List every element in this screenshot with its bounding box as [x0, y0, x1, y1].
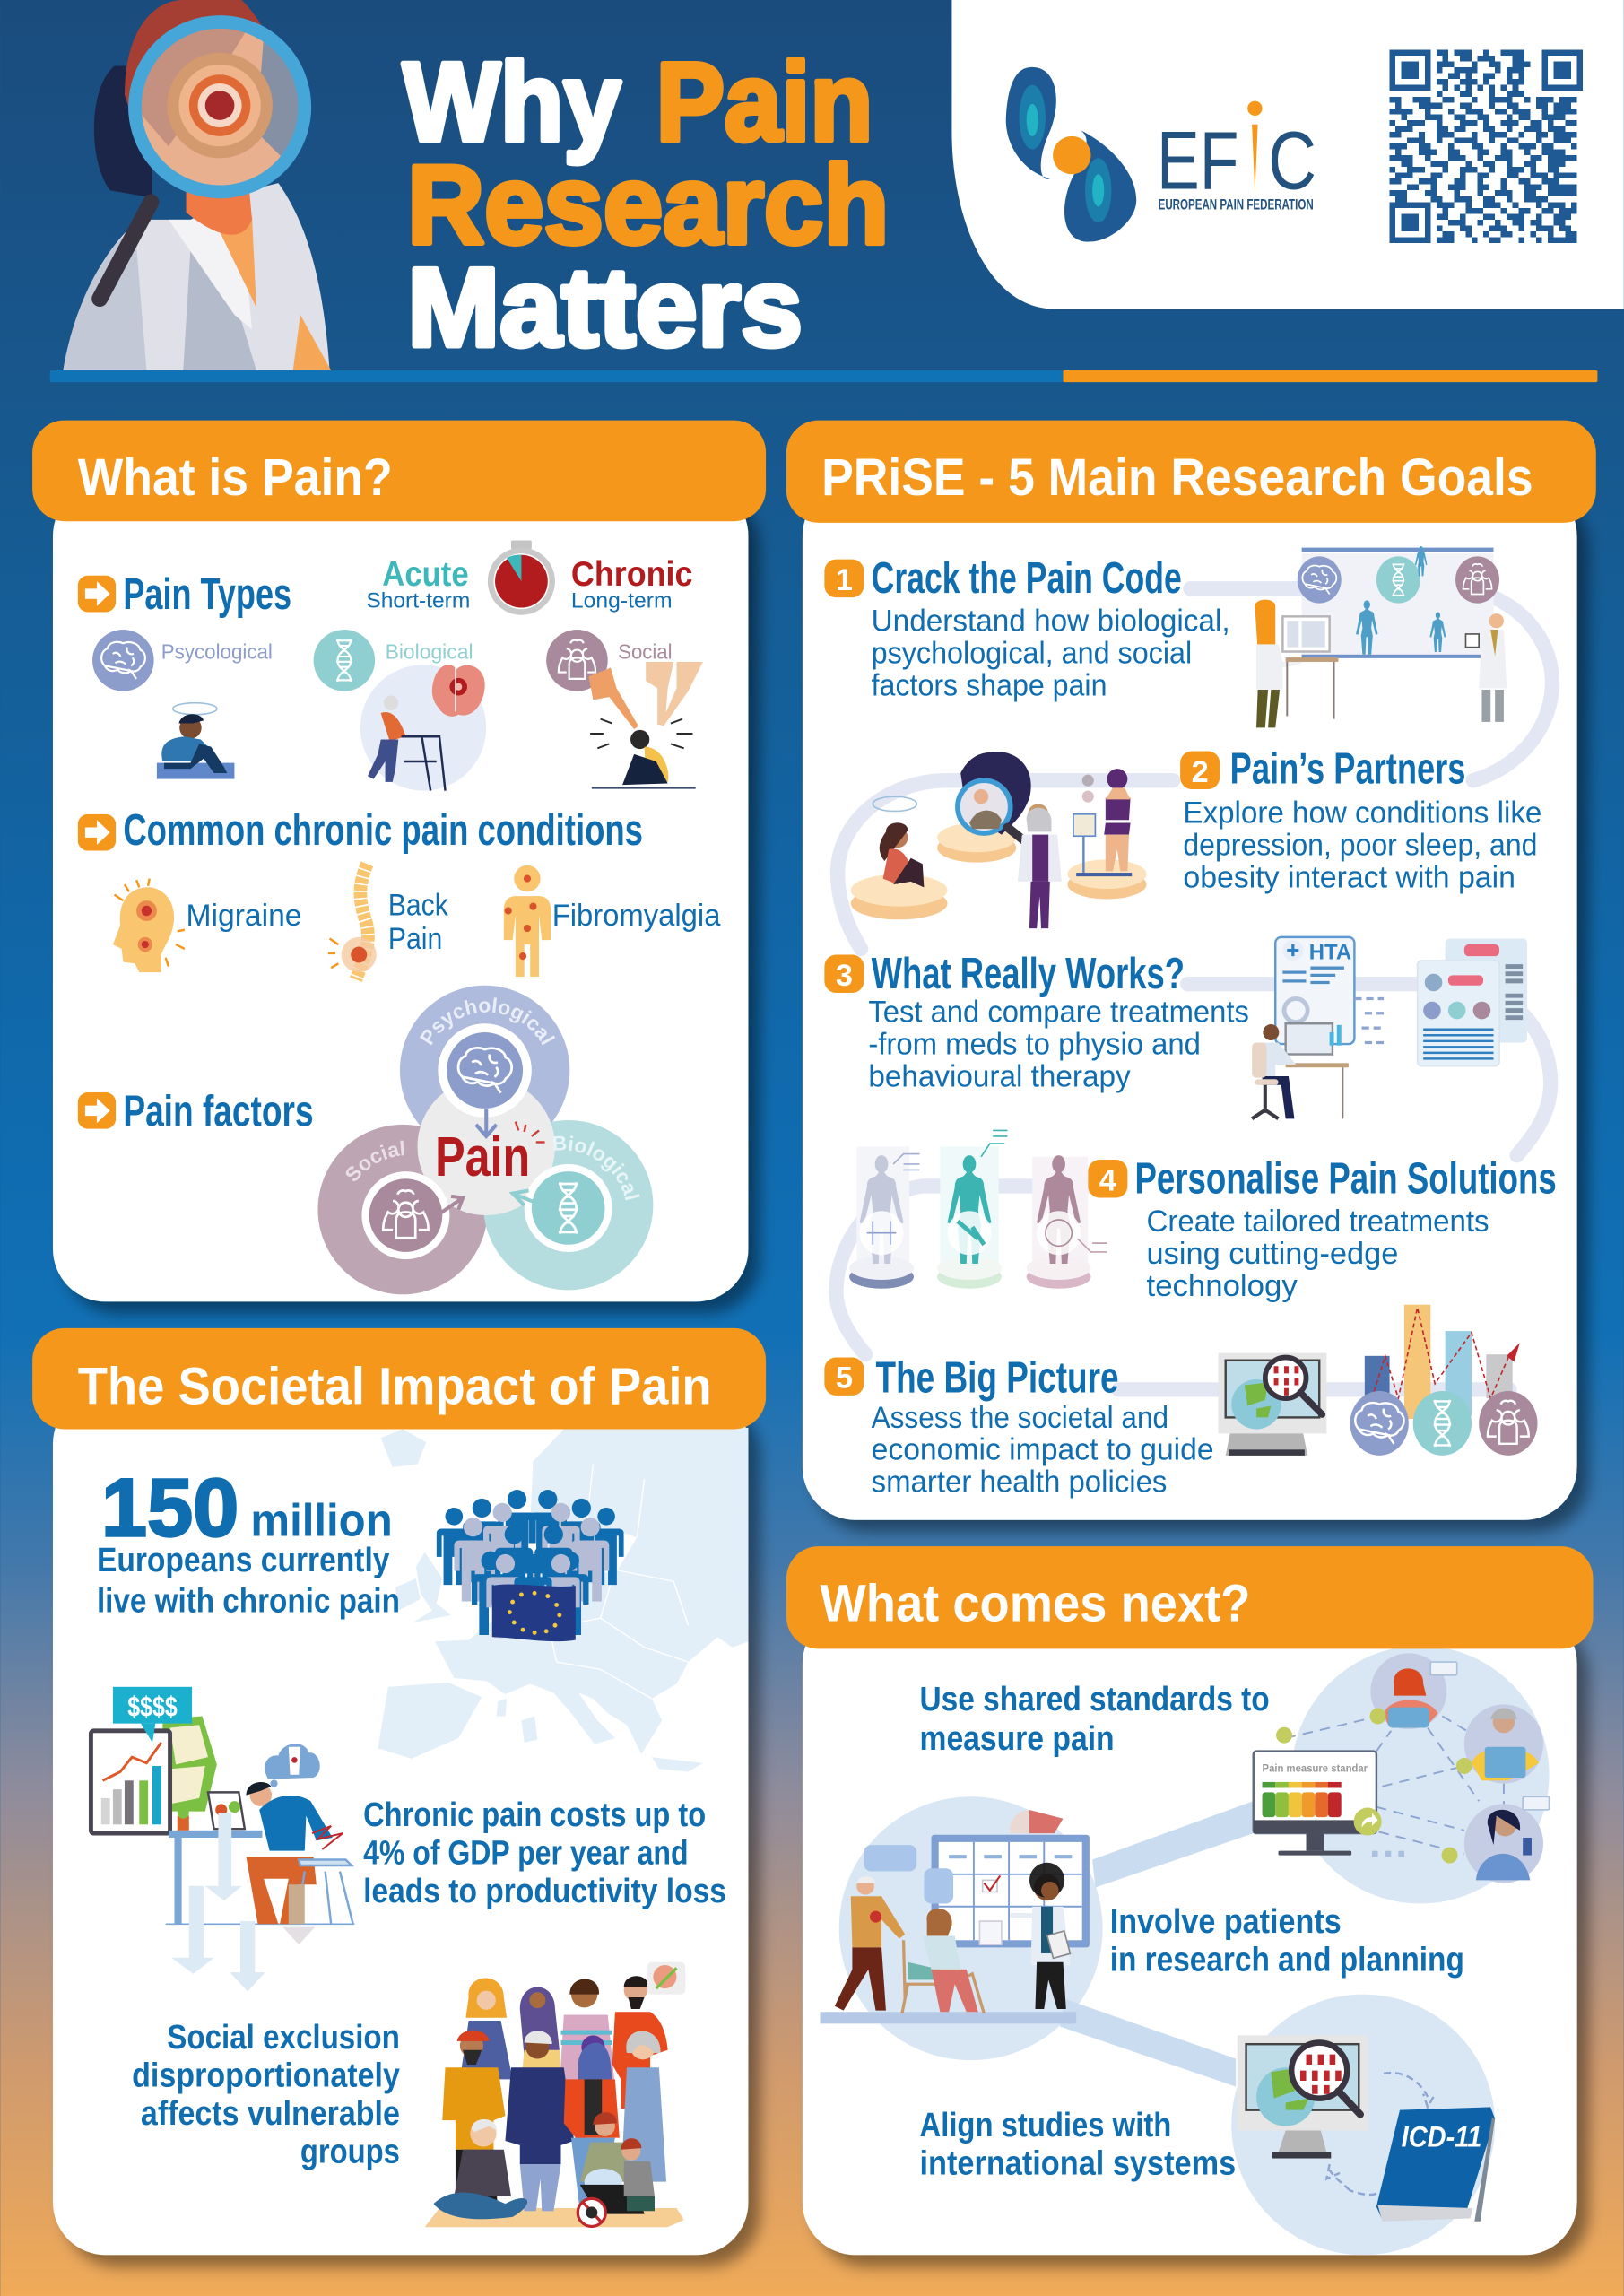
EFIC logo — [1006, 67, 1316, 242]
fibromyalgia — [504, 865, 721, 977]
goal 5 text: economic impact to guide — [872, 1433, 1214, 1467]
text: align studies — [919, 2106, 1236, 2181]
header logo panel — [951, 0, 1624, 309]
text: cost of chronic pain: 4% of GDP per year and — [363, 1833, 689, 1871]
chronic label — [571, 555, 692, 613]
EFIC logo: C — [1268, 116, 1316, 207]
back pain — [328, 863, 449, 979]
panel body — [803, 483, 1577, 1520]
goal 4 text: technology — [1147, 1269, 1298, 1303]
biological type — [314, 630, 486, 791]
europe map — [378, 1428, 748, 1772]
goal 1 text: psychological, and social — [872, 637, 1192, 671]
title: Matters — [407, 246, 803, 370]
goal 5 text: smarter health policies — [872, 1465, 1167, 1500]
panel heading: What is Pain? — [78, 448, 393, 507]
illustration: economic cost: $$$$ — [127, 1691, 178, 1722]
fibromyalgia: Fibromyalgia — [552, 899, 721, 933]
text: involve patients: in research and planning — [1110, 1941, 1464, 1979]
goal 2 text: 2 — [1192, 755, 1209, 789]
illustration: network of people — [1276, 1653, 1550, 1883]
stat: 150 million: million — [250, 1495, 393, 1546]
goal 2 text — [1180, 744, 1541, 894]
panel heading — [32, 421, 766, 521]
text: social exclusion — [132, 2018, 400, 2170]
goal 2 text: Explore how conditions like — [1183, 796, 1541, 831]
EFIC logo: EUROPEAN PAIN FEDERATION — [1159, 196, 1314, 213]
panel: societal impact — [32, 1328, 766, 2255]
text: shared standards — [919, 1680, 1270, 1757]
ICD-11 book — [1376, 2107, 1495, 2222]
goal 2 text: Pain’s Partners — [1230, 744, 1465, 793]
illustration: patients and doctor — [820, 1810, 1090, 2023]
goal 5 text: The Big Picture — [876, 1354, 1119, 1403]
title: Pain — [656, 41, 873, 165]
text: social exclusion: disproportionately — [132, 2057, 400, 2094]
conditions heading — [78, 806, 643, 855]
goal 2 text: depression, poor sleep, and — [1183, 828, 1537, 862]
panel heading: PRiSE - 5 Main Research Goals — [821, 448, 1533, 507]
goal 4 text — [1088, 1155, 1557, 1303]
goal 4 text: using cutting-edge — [1147, 1237, 1398, 1271]
ICD-11 book: ICD-11 — [1402, 2119, 1481, 2152]
crowd with EU flag — [437, 1490, 624, 1641]
goal 3 text — [824, 950, 1249, 1093]
goal 3 text: -from meds to physio and — [868, 1028, 1201, 1062]
goal 1 text: Crack the Pain Code — [872, 554, 1182, 603]
monitor: pain measure standard: Pain measure standar — [1263, 1762, 1368, 1775]
goal 1 text: 1 — [836, 563, 853, 597]
goal 4 text: 4 — [1099, 1163, 1116, 1197]
panel body — [53, 1391, 748, 2255]
pain types heading: Pain Types — [123, 570, 291, 619]
social type — [546, 630, 703, 787]
panel heading — [786, 421, 1596, 523]
goal 3 text: What Really Works? — [872, 950, 1185, 998]
panel body — [803, 1611, 1577, 2255]
goal 5 text: Assess the societal and — [872, 1401, 1168, 1435]
goal 4 text: Create tailored treatments — [1147, 1205, 1489, 1239]
goal 3 illustration — [1252, 937, 1527, 1118]
text: cost of chronic pain — [363, 1796, 726, 1909]
illustration: monitor with globe — [1238, 2035, 1434, 2195]
goal 1 text — [824, 554, 1230, 703]
goal 3 text: Test and compare treatments — [868, 996, 1249, 1030]
chronic label: Long-term — [571, 589, 673, 613]
connector paths — [836, 588, 1552, 1389]
text: cost of chronic pain: leads to productivity loss — [363, 1872, 726, 1909]
QR code — [1390, 53, 1580, 240]
migraine — [113, 879, 302, 972]
panel heading — [32, 1328, 766, 1429]
panel: what comes next — [786, 1546, 1594, 2255]
illustration: economic cost — [91, 1687, 354, 1991]
pain factors venn diagram: Pain — [435, 1126, 530, 1188]
monitor: pain measure standard — [1254, 1752, 1382, 1856]
goal 4 illustration — [849, 1130, 1107, 1289]
pain factors venn diagram: Biological — [553, 1135, 640, 1200]
panel heading: What comes next? — [820, 1574, 1250, 1632]
goal 1 text: Understand how biological, — [872, 604, 1230, 639]
biological type: Biological — [386, 640, 473, 664]
migraine: Migraine — [187, 899, 302, 933]
goal 3 text: 3 — [836, 959, 853, 993]
text: cost of chronic pain: Chronic pain costs up to — [363, 1796, 706, 1833]
acute label: Short-term — [366, 589, 470, 613]
title: Research — [407, 144, 889, 267]
panel heading — [786, 1546, 1594, 1648]
pain factors venn diagram — [317, 985, 653, 1295]
text: involve patients — [1110, 1902, 1464, 1979]
header rule — [50, 370, 1597, 382]
panel: PRiSE research goals — [786, 421, 1596, 1520]
goal 3 illustration: HTA — [1309, 940, 1351, 964]
panel heading: The Societal Impact of Pain — [78, 1358, 712, 1416]
psychological type — [92, 630, 273, 779]
factors heading — [78, 1088, 314, 1136]
back pain: Pain — [388, 922, 442, 956]
acute label: Acute — [382, 555, 469, 594]
stopwatch icon — [488, 540, 555, 615]
title: Why — [403, 41, 621, 165]
panel: What is Pain — [32, 420, 769, 1322]
text: align studies: Align studies with — [919, 2106, 1171, 2144]
goal 3 text: behavioural therapy — [868, 1059, 1131, 1093]
hero illustration: person with magnifier — [63, 0, 331, 370]
text: involve patients: Involve patients — [1110, 1902, 1342, 1940]
pain types heading — [78, 570, 291, 619]
acute label — [366, 555, 470, 613]
text: social exclusion: affects vulnerable — [141, 2094, 400, 2132]
conditions heading: Common chronic pain conditions — [123, 806, 643, 855]
psychological type: Psycological — [161, 640, 273, 664]
goal 5 illustration — [1219, 1305, 1537, 1456]
chronic label: Chronic — [571, 555, 692, 594]
EFIC logo: EF — [1157, 116, 1238, 207]
factors heading: Pain factors — [123, 1088, 314, 1136]
pain factors venn diagram: Psychological — [420, 997, 556, 1046]
text: shared standards: Use shared standards to — [919, 1680, 1270, 1718]
text: align studies: international systems — [919, 2144, 1236, 2181]
text: social exclusion: groups — [300, 2132, 400, 2170]
goal 2 text: obesity interact with pain — [1183, 860, 1515, 894]
stat: 150 million — [97, 1463, 400, 1620]
panel body — [53, 483, 748, 1301]
text: social exclusion: Social exclusion — [167, 2018, 400, 2056]
goal 2 illustration — [851, 752, 1147, 928]
title — [403, 41, 889, 370]
text: shared standards: measure pain — [919, 1719, 1115, 1757]
background circles and connecting bands — [839, 1646, 1550, 2255]
goal 5 text — [824, 1354, 1214, 1500]
goal 5 text: 5 — [836, 1361, 853, 1396]
stat: 150 million: Europeans currently — [97, 1541, 390, 1578]
pain factors venn diagram: Social — [346, 1141, 404, 1181]
goal 1 text: factors shape pain — [872, 669, 1107, 703]
goal 1 illustration — [1255, 546, 1507, 727]
illustration: diverse group — [425, 1962, 685, 2227]
social type: Social — [618, 640, 673, 664]
stat: 150 million: live with chronic pain — [97, 1582, 400, 1620]
back pain: Back — [388, 888, 449, 922]
stat: 150 million: 150 — [101, 1463, 239, 1554]
